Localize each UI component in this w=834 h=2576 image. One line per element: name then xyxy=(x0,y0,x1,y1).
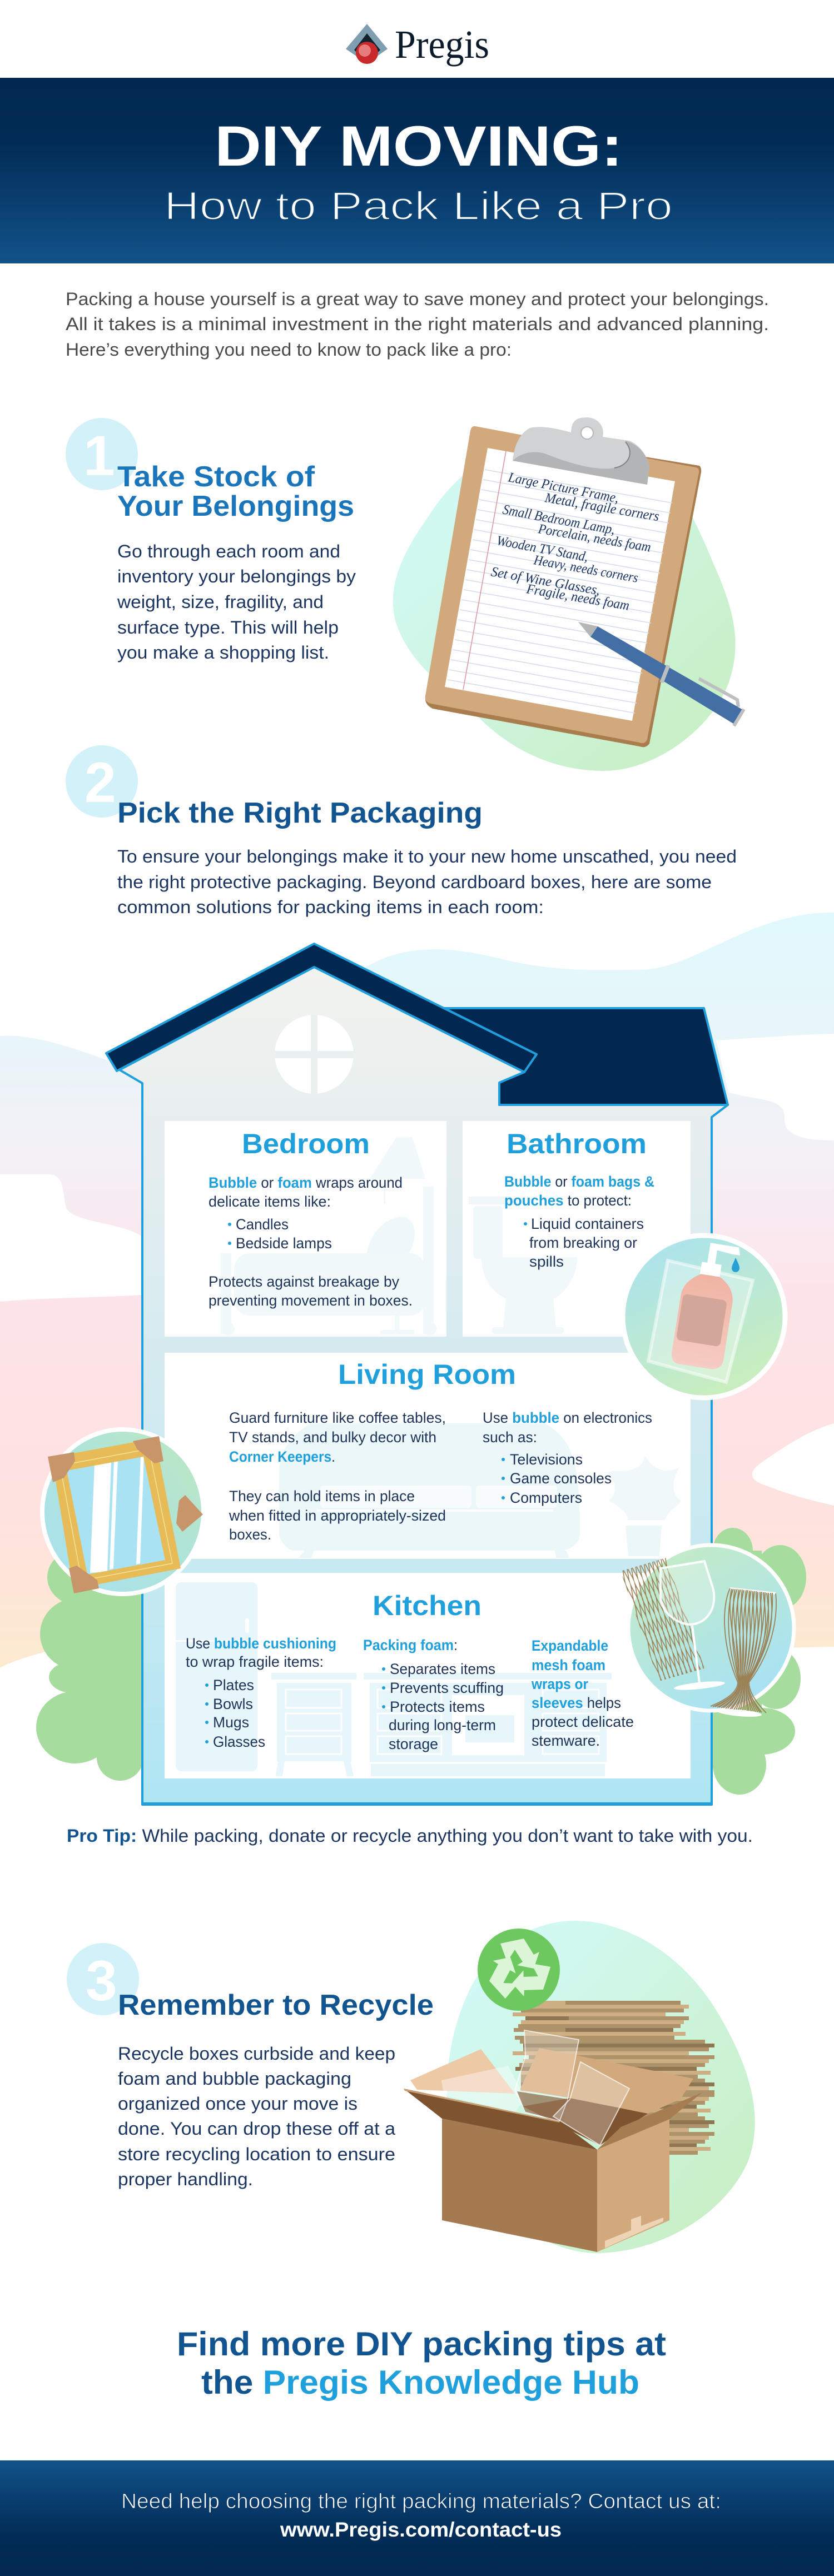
icon: picture frame with corner keepers xyxy=(42,1429,203,1594)
bedroom text: Protects against breakage by xyxy=(209,1273,399,1290)
blob xyxy=(393,439,736,771)
ghost toilet xyxy=(469,1197,577,1334)
footer banner xyxy=(0,2460,834,2576)
title: DIY MOVING: xyxy=(215,114,623,178)
wrapped glass xyxy=(717,1708,762,1718)
step 3 body: store recycling location to ensure xyxy=(118,2144,395,2164)
bathroom text: Liquid containers xyxy=(531,1215,644,1232)
icon: Pregis diamond xyxy=(346,24,388,64)
step 3 body xyxy=(118,2044,395,2189)
panel: living room xyxy=(165,1353,691,1559)
living room right text: Computers xyxy=(510,1489,582,1506)
bathroom text: Bubble or foam bags & xyxy=(504,1173,654,1190)
ghost sofa and plant xyxy=(279,1423,681,1558)
ghost bedroom furniture xyxy=(221,1137,436,1336)
step 3 number badge xyxy=(67,1943,139,2015)
living room right text: Use bubble on electronics xyxy=(483,1409,652,1426)
handwritten list: Metal, fragile corners xyxy=(543,490,661,524)
ghost kitchen furniture xyxy=(176,1582,612,1776)
handwritten list: Wooden TV Stand, xyxy=(495,533,589,565)
kitchen column 1: Mugs xyxy=(213,1714,249,1731)
step 3 body: Recycle boxes curbside and keep xyxy=(118,2044,395,2064)
attic window xyxy=(275,1015,354,1094)
bedroom text xyxy=(209,1174,413,1309)
step 3 panel xyxy=(67,1921,755,2253)
water drop xyxy=(732,1258,739,1272)
cardboard stack xyxy=(513,2001,714,2155)
header logo xyxy=(346,22,489,67)
step 1 body xyxy=(117,541,356,662)
kitchen column 1 xyxy=(186,1635,336,1750)
kitchen column 2: Packing foam: xyxy=(363,1637,458,1653)
kitchen column 1: Bowls xyxy=(213,1696,253,1712)
bathroom text: from breaking or xyxy=(529,1234,637,1251)
living room left text: Guard furniture like coffee tables, xyxy=(229,1409,446,1426)
handwritten list: Small Bedroom Lamp, xyxy=(502,502,616,537)
living room right text: Game consoles xyxy=(510,1470,612,1487)
frame xyxy=(52,1438,181,1589)
bottle xyxy=(670,1239,741,1371)
kitchen column 3: protect delicate xyxy=(532,1713,634,1730)
blob xyxy=(447,1921,755,2253)
step 3 body: done. You can drop these off at a xyxy=(118,2119,395,2139)
kitchen column 2: Separates items xyxy=(390,1661,495,1677)
recycling illustration xyxy=(404,1921,755,2253)
bedroom text: delicate items like: xyxy=(209,1193,331,1210)
bathroom text: pouches to protect: xyxy=(504,1192,632,1209)
living room right text: such as: xyxy=(483,1429,537,1446)
footer prompt: Need help choosing the right packing materials? Contact us at: xyxy=(121,2490,721,2513)
logo wordmark: Pregis xyxy=(395,22,489,67)
paper xyxy=(445,448,675,721)
panel: bedroom xyxy=(165,1121,446,1337)
step 1 panel xyxy=(66,417,744,771)
step 2 intro xyxy=(66,745,737,917)
title banner xyxy=(0,78,834,263)
clip xyxy=(513,417,649,485)
pen xyxy=(578,622,744,726)
subtitle: How to Pack Like a Pro xyxy=(164,185,673,228)
call to action: Find more DIY packing tips at xyxy=(177,2325,666,2363)
footer link: www.Pregis.com/contact-us xyxy=(280,2518,562,2541)
step 2 body: To ensure your belongings make it to your new home unscathed, you need xyxy=(117,846,737,866)
step 3 body: foam and bubble packaging xyxy=(118,2069,351,2089)
handwritten list: Set of Wine Glasses, xyxy=(490,564,602,598)
handwritten list: Fragile, needs foam xyxy=(525,581,631,614)
kitchen column 3: stemware. xyxy=(532,1732,600,1749)
step 1 number badge xyxy=(66,418,138,490)
kitchen column 2: storage xyxy=(389,1736,438,1752)
icon: liquid bottle in bag xyxy=(623,1235,785,1398)
intro paragraph: Packing a house yourself is a great way to save money and protect your belongings. xyxy=(66,289,769,309)
kitchen column 3: Expandable xyxy=(532,1637,608,1654)
house walls xyxy=(120,967,728,1805)
bedroom text: Candles xyxy=(236,1216,289,1233)
kitchen column 3: wraps or xyxy=(531,1676,588,1692)
step 1 body: surface type. This will help xyxy=(117,617,339,637)
living room left text: when fitted in appropriately-sized xyxy=(229,1507,446,1524)
kitchen column 3: sleeves helps xyxy=(532,1695,621,1711)
bedroom text: Bedside lamps xyxy=(236,1235,332,1252)
main roof xyxy=(106,944,537,1072)
bedroom text: preventing movement in boxes. xyxy=(209,1292,413,1309)
kitchen column 2: during long-term xyxy=(389,1717,496,1733)
living room heading: Living Room xyxy=(338,1359,516,1390)
kitchen column 1: to wrap fragile items: xyxy=(186,1653,324,1670)
handwritten list: Porcelain, needs foam xyxy=(537,521,652,555)
bedroom text: Bubble or foam wraps around xyxy=(209,1174,403,1191)
kitchen column 3: mesh foam xyxy=(532,1657,605,1673)
kitchen column 2: Prevents scuffing xyxy=(390,1680,504,1696)
bag xyxy=(648,1260,753,1382)
corner keepers xyxy=(48,1452,75,1482)
kitchen column 2 xyxy=(363,1637,504,1752)
step 2 body: the right protective packaging. Beyond cardboard boxes, here are some xyxy=(117,872,712,892)
step 1 body: weight, size, fragility, and xyxy=(117,592,324,612)
intro paragraph: All it takes is a minimal investment in the right materials and advanced planning. xyxy=(66,314,769,334)
step 3 heading: Remember to Recycle xyxy=(118,1989,434,2021)
living room left text xyxy=(229,1409,446,1543)
bedroom heading: Bedroom xyxy=(242,1128,370,1159)
step 1 heading: Take Stock of xyxy=(117,461,315,493)
green bushes xyxy=(36,1528,806,1795)
step 2 number badge xyxy=(66,745,138,818)
handwritten list xyxy=(490,470,661,614)
kitchen column 1: Use bubble cushioning xyxy=(186,1635,336,1652)
step 2 body: common solutions for packing items in each room: xyxy=(117,897,544,917)
kitchen heading: Kitchen xyxy=(373,1590,481,1621)
bathroom text: spills xyxy=(529,1253,564,1270)
step 1 body: inventory your belongings by xyxy=(117,566,356,586)
living room right text: Televisions xyxy=(510,1451,583,1468)
step 3 body: organized once your move is xyxy=(118,2094,358,2114)
intro paragraph xyxy=(66,289,769,360)
step 3 number badge: 3 xyxy=(86,1949,117,2012)
step 1 body: Go through each room and xyxy=(117,541,340,561)
step 1 heading xyxy=(117,461,354,522)
background sky and clouds xyxy=(0,913,834,1668)
icon: wine glasses in mesh sleeves xyxy=(620,1545,794,1718)
kitchen column 1: Glasses xyxy=(213,1733,265,1750)
call to action xyxy=(177,2325,666,2401)
step 1 body: you make a shopping list. xyxy=(117,642,329,662)
step 1 heading: Your Belongings xyxy=(117,490,354,522)
tape xyxy=(605,2216,663,2248)
step 3 body: proper handling. xyxy=(118,2169,253,2189)
intro paragraph: Here’s everything you need to know to pack like a pro: xyxy=(66,340,512,360)
pro tip: Pro Tip: While packing, donate or recycle anything you don’t want to take with you. xyxy=(67,1826,753,1846)
kitchen column 2: Protects items xyxy=(390,1698,485,1715)
panel: bathroom xyxy=(463,1121,691,1337)
kitchen column 1: Plates xyxy=(213,1677,254,1693)
clipboard board xyxy=(425,429,701,747)
kitchen column 3 xyxy=(531,1637,634,1749)
step 2 body xyxy=(117,846,737,917)
frame glass xyxy=(67,1457,165,1575)
living room left text: TV stands, and bulky decor with xyxy=(229,1429,436,1446)
living room right text xyxy=(483,1409,652,1506)
clear glass xyxy=(661,1561,714,1625)
bathroom text xyxy=(504,1173,654,1270)
living room left text: They can hold items in place xyxy=(229,1488,415,1504)
step 1 number badge: 1 xyxy=(83,424,115,487)
side roof xyxy=(444,1008,728,1105)
bubble bags xyxy=(441,2030,629,2145)
recycle badge xyxy=(478,1929,560,2011)
clipboard illustration xyxy=(393,417,744,771)
handwritten list: Heavy, needs corners xyxy=(532,552,639,586)
mesh sleeve xyxy=(620,1558,704,1681)
bathroom heading: Bathroom xyxy=(507,1128,647,1159)
living room left text: boxes. xyxy=(229,1526,271,1543)
step 2 heading: Pick the Right Packaging xyxy=(117,797,483,829)
house xyxy=(106,944,728,1805)
step 2 number badge: 2 xyxy=(85,751,116,814)
open box xyxy=(404,2030,702,2252)
call to action: the Pregis Knowledge Hub xyxy=(201,2364,639,2401)
handwritten list: Large Picture Frame, xyxy=(507,470,620,506)
panel: kitchen xyxy=(165,1573,691,1778)
living room left text: Corner Keepers. xyxy=(229,1448,335,1465)
